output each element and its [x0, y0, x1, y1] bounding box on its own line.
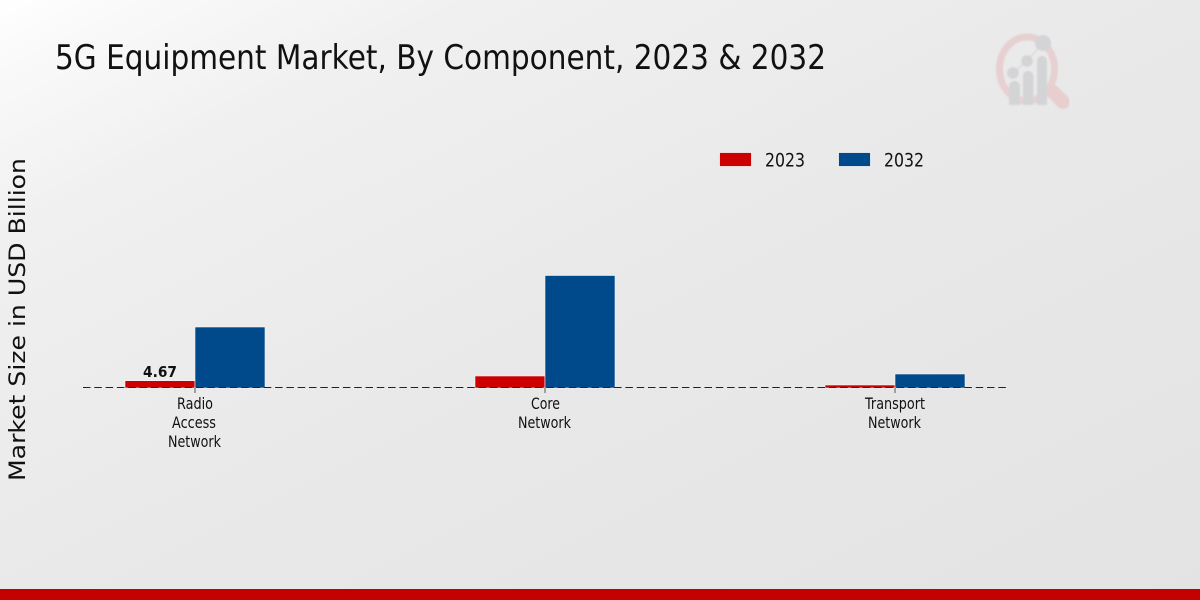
category label: Radio Access Network: Network — [168, 432, 222, 451]
legend item: 2023 — [720, 150, 805, 172]
category label: Core Network: Network — [518, 413, 572, 432]
bars: Radio Access Network — [125, 327, 265, 388]
legend item: 2023: 2023 — [765, 150, 805, 172]
legend item: 2032 — [838, 150, 924, 172]
category label: Radio Access Network: Radio — [177, 394, 213, 413]
category label: Radio Access Network: Access — [172, 413, 216, 432]
category label: Transport Network: Network — [868, 413, 922, 432]
category label: Radio Access Network — [168, 394, 222, 451]
bars: Core Network — [475, 276, 615, 388]
bars: Transport Network — [825, 374, 965, 388]
category label: Transport Network — [864, 394, 925, 432]
category label: Core Network: Core — [531, 394, 560, 413]
y-axis label: Market Size in USD Billion — [5, 158, 31, 481]
category label: Transport Network: Transport — [864, 394, 925, 413]
data label: 4.67: 4.67 — [143, 363, 177, 381]
legend — [720, 150, 924, 172]
icon: watermark magnifier logo — [1000, 35, 1063, 105]
footer bar — [0, 589, 1200, 600]
legend item: 2032: 2032 — [884, 150, 924, 172]
title: 5G Equipment Market, By Component, 2023 & 2032 — [55, 38, 826, 78]
category label: Core Network — [518, 394, 572, 432]
bar chart — [83, 276, 1008, 451]
